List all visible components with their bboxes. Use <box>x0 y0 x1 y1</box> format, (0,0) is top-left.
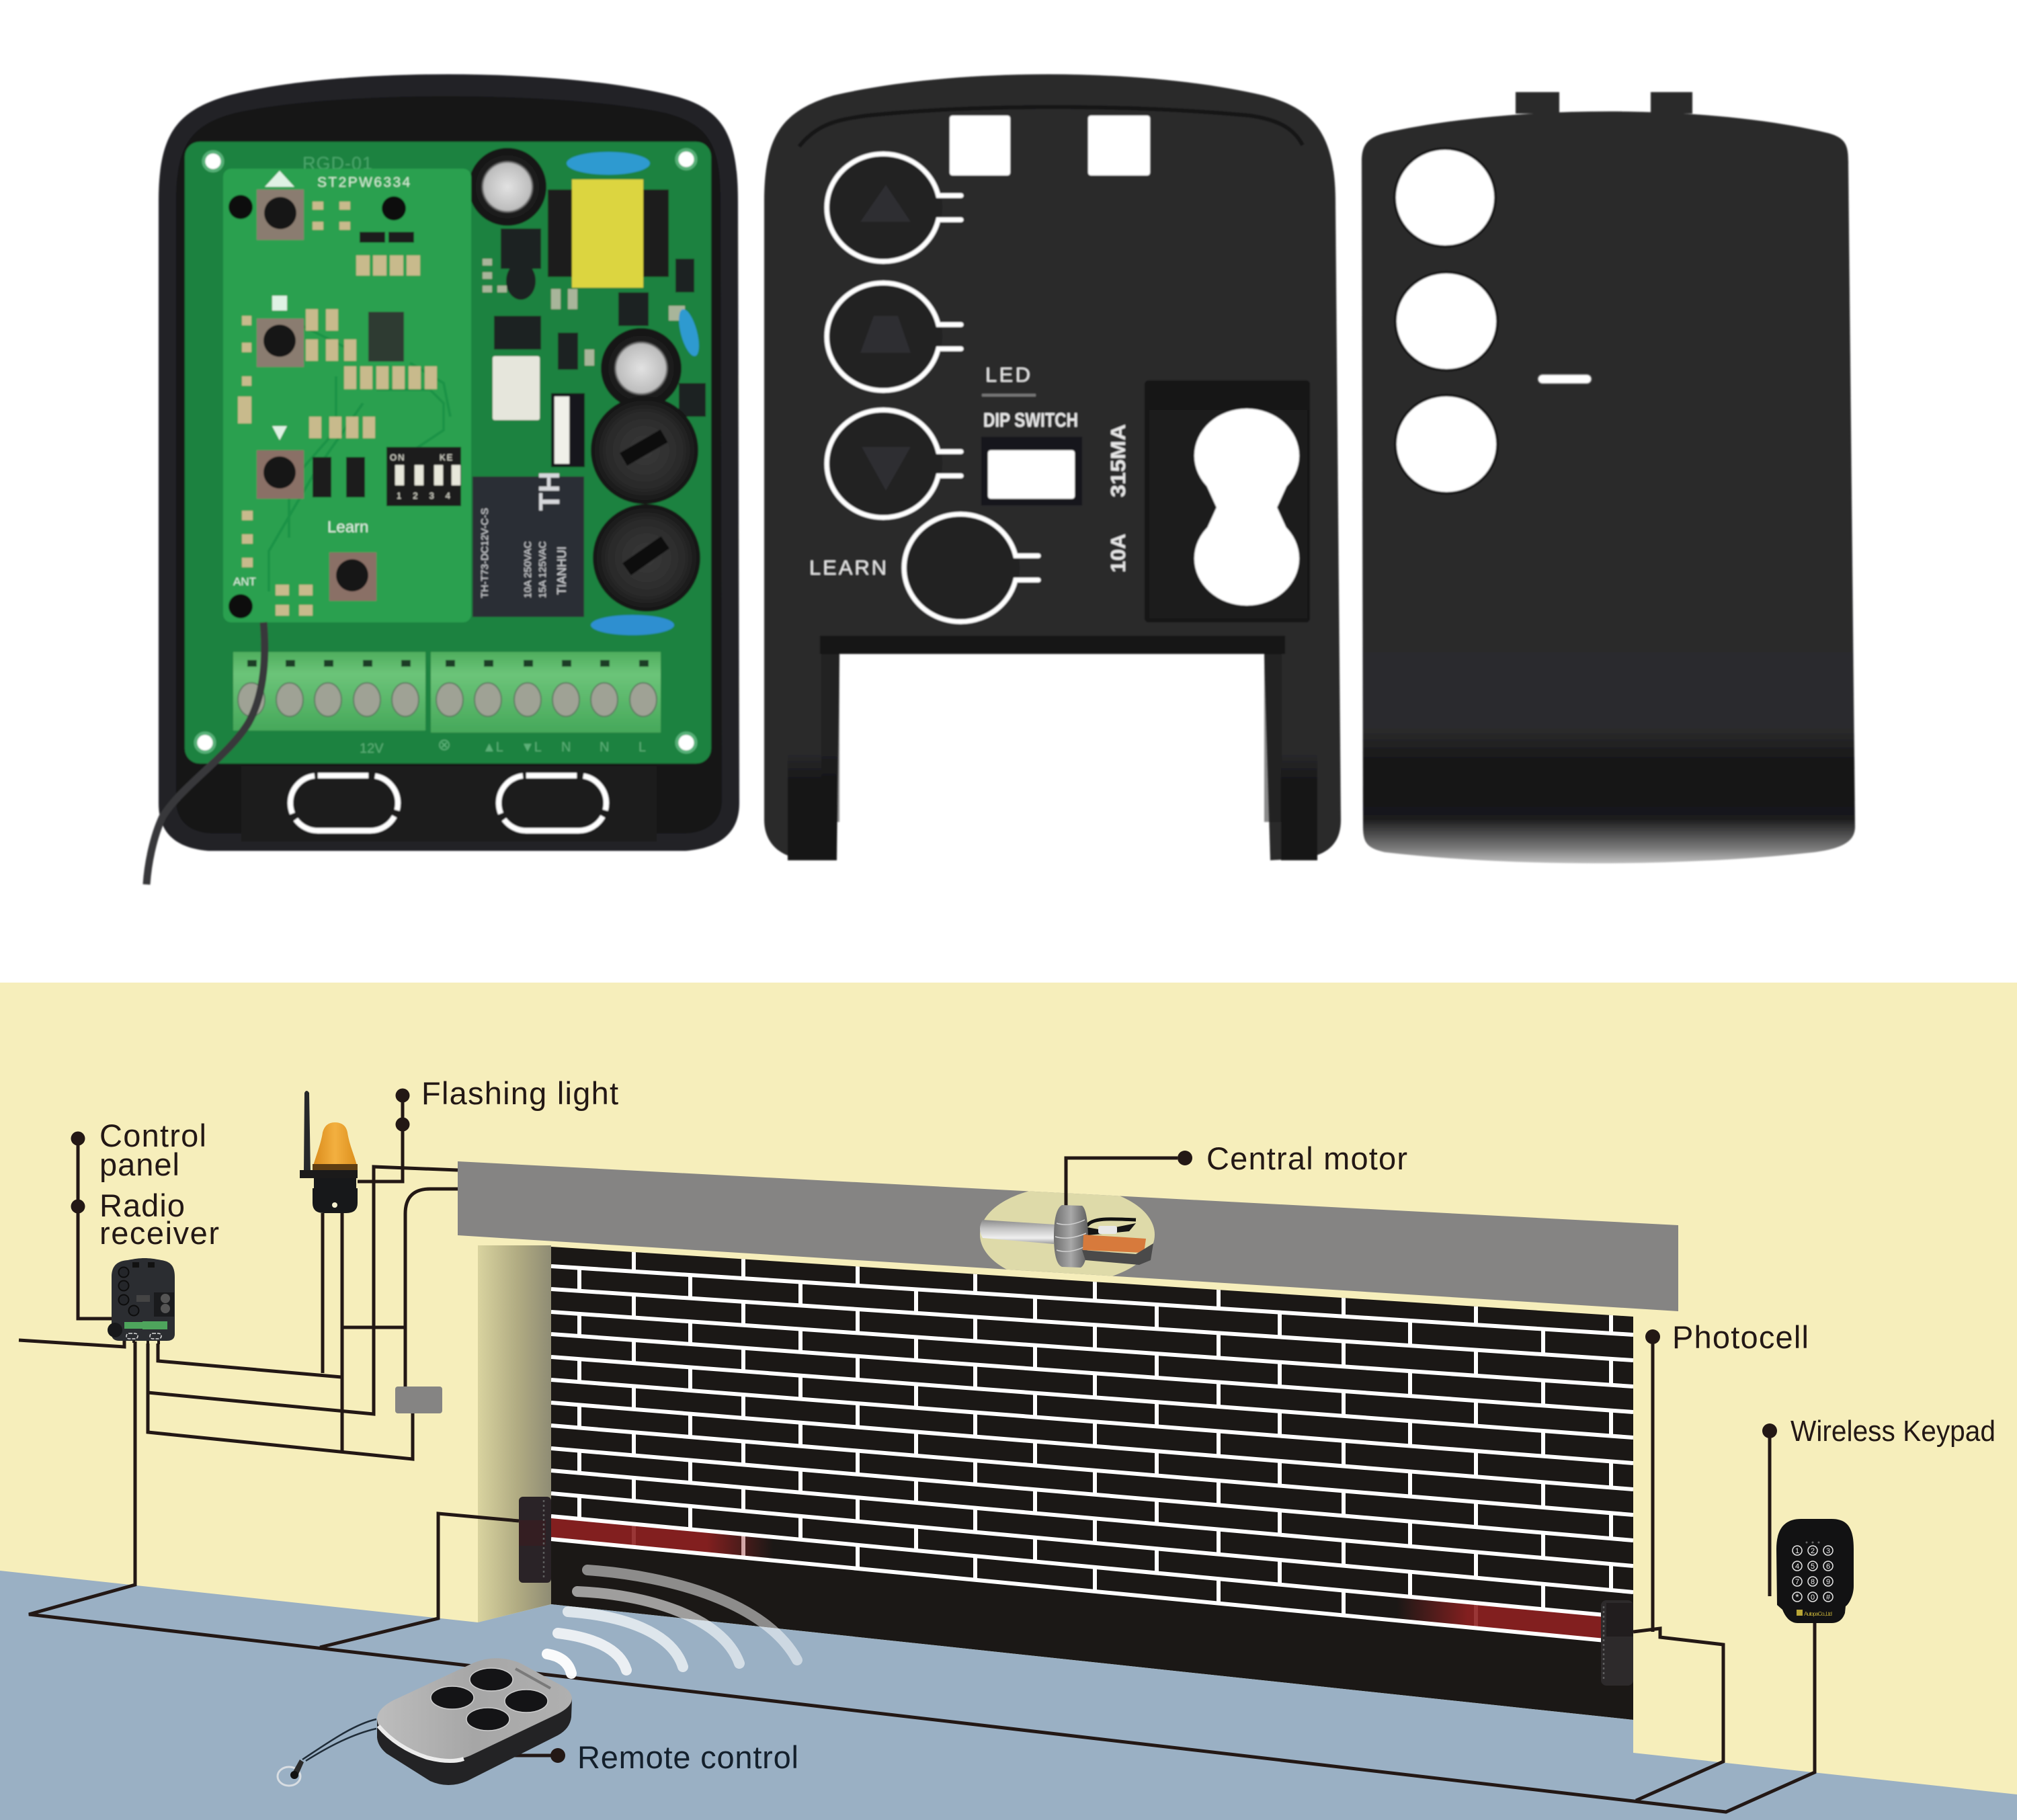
fuse area <box>154 1292 174 1317</box>
fuse recess <box>1145 380 1310 622</box>
remote front highlight <box>378 1726 464 1761</box>
key digits: 6 <box>1826 1563 1830 1571</box>
key ring <box>278 1760 304 1786</box>
terminal blocks <box>233 652 661 733</box>
relay: TH-T73-DC12V-C-S <box>479 508 491 598</box>
wire: switch box to receiver <box>148 1393 413 1459</box>
key digits: 2 <box>1811 1547 1815 1555</box>
DIP switch <box>386 447 462 506</box>
key digits: 3 <box>1826 1547 1830 1555</box>
wire: control panel leader <box>78 1139 114 1319</box>
case shell <box>159 74 739 851</box>
knockouts <box>126 1333 161 1339</box>
terminal slots <box>247 660 649 667</box>
LEARN label: LEARN <box>809 556 887 579</box>
windows <box>132 1262 155 1268</box>
board label: RGD-01 <box>302 153 373 173</box>
DIP window <box>981 437 1082 505</box>
white capacitor <box>1098 1226 1117 1234</box>
blue capacitor side <box>675 307 703 358</box>
main circuit board <box>185 142 711 763</box>
microchip <box>368 312 404 362</box>
capacitor top <box>468 148 546 226</box>
key digits: * <box>1795 1591 1799 1602</box>
blue capacitor bottom <box>591 615 674 635</box>
key digits: # <box>1826 1594 1831 1602</box>
DIP switch: 1234 <box>397 491 462 501</box>
daughter board <box>223 169 471 622</box>
door pillar <box>478 1245 551 1622</box>
label: central motor: Central motor <box>1206 1141 1407 1176</box>
steel shaft <box>980 1220 1055 1244</box>
wire: flashing light return <box>321 1213 324 1373</box>
brick pattern shutter door <box>551 1247 1633 1720</box>
panel: front cover plate <box>764 74 1341 860</box>
terminal labels: ⊗ <box>438 736 451 754</box>
icon: right photocell <box>1601 1600 1633 1686</box>
terminal labels: L <box>639 740 646 755</box>
key digits: 4 <box>1795 1563 1799 1571</box>
antenna label: ANT <box>233 575 256 588</box>
terminal screws <box>238 683 657 716</box>
door surface <box>551 1247 1633 1720</box>
key digits: 9 <box>1826 1578 1830 1586</box>
button rings <box>827 153 1038 622</box>
label: photocell: Photocell <box>1672 1319 1809 1355</box>
key digits <box>1795 1547 1831 1602</box>
infrared beam right <box>1402 1598 1601 1639</box>
central motor highlight <box>980 1191 1155 1276</box>
infrared beam left <box>551 1518 768 1558</box>
top tabs <box>1516 92 1692 114</box>
housing <box>112 1258 175 1341</box>
key ring cord <box>302 1719 376 1761</box>
black wiring <box>1087 1223 1136 1235</box>
antenna grommet <box>108 1323 122 1337</box>
leader dots <box>71 1089 1777 1763</box>
label: control panel: panel <box>99 1147 179 1182</box>
leg inner shadows <box>788 636 1317 860</box>
brick joints <box>579 1249 1611 1641</box>
terminal labels <box>360 736 646 756</box>
buttons <box>118 1268 138 1316</box>
wire: left photocell <box>320 1514 519 1647</box>
cover body <box>764 74 1341 860</box>
relay: TIANHUI <box>555 546 569 595</box>
DIP switch: ON <box>390 452 406 462</box>
wire: floor conduit <box>29 1341 1815 1812</box>
cable loop <box>1087 1219 1136 1226</box>
blue capacitor top <box>567 152 650 175</box>
regulator <box>551 393 585 467</box>
wire: right photocell <box>1633 1628 1723 1801</box>
orange gear housing <box>1083 1235 1146 1253</box>
remote top face <box>377 1658 572 1760</box>
power section components <box>494 229 706 417</box>
SMD parts <box>238 202 437 616</box>
terminal labels: ▼L <box>521 740 542 755</box>
label: flashing light: Flashing light <box>421 1075 618 1111</box>
label: radio receiver: receiver <box>99 1215 219 1251</box>
amber dome <box>313 1122 358 1168</box>
tactile buttons <box>257 190 376 601</box>
wire: central motor leader <box>1066 1158 1178 1220</box>
key digits: 7 <box>1795 1578 1799 1586</box>
screws <box>229 195 406 618</box>
remote slot <box>516 1669 550 1688</box>
relay: 10A 250VAC <box>522 541 534 598</box>
DIP switch label: DIP SWITCH <box>983 409 1078 431</box>
mounting holes <box>196 150 696 752</box>
key digits: 5 <box>1811 1563 1815 1571</box>
key circles <box>1793 1546 1833 1602</box>
wire: mains feed <box>19 1339 124 1347</box>
learn label: Learn <box>327 518 368 536</box>
brick courses <box>551 1266 1633 1643</box>
dome collar <box>313 1164 358 1172</box>
panel: back cover plate <box>1362 92 1855 863</box>
dip switch <box>136 1295 150 1302</box>
wire: lintel to receiver <box>148 1167 458 1414</box>
terminal labels: 12V <box>360 741 384 756</box>
small resistors power section <box>483 259 685 366</box>
wire: receiver output <box>158 1343 341 1377</box>
icon: left photocell <box>519 1497 551 1583</box>
panel: garage installation scene background wall <box>0 983 2017 1820</box>
lamp mount <box>300 1170 358 1178</box>
lamp base <box>313 1178 358 1213</box>
relay <box>472 471 584 617</box>
output wires <box>134 1341 159 1344</box>
fuse label 10A: 10A <box>1106 534 1130 573</box>
labels <box>99 1075 1995 1775</box>
DIP switch: KE <box>440 452 454 462</box>
relay: 15A 125VAC <box>537 541 548 598</box>
button holes <box>1395 149 1497 493</box>
label: control panel: Control <box>99 1118 206 1153</box>
fuse label 315MA: 315MA <box>1106 424 1130 497</box>
door lintel <box>458 1161 1678 1311</box>
yellow transformer <box>548 179 669 288</box>
embossed arrows <box>860 185 911 491</box>
wire: keypad leader <box>1768 1431 1772 1596</box>
white page background <box>0 0 2017 983</box>
antenna wire <box>147 622 265 884</box>
icon: receiver unit <box>108 1258 175 1344</box>
key digits: 8 <box>1811 1578 1815 1586</box>
cable knockouts band <box>241 766 657 841</box>
capacitor middle <box>601 328 682 409</box>
icon: remote control <box>278 1658 572 1786</box>
label divider <box>982 394 1036 397</box>
fuse holders <box>591 397 700 612</box>
signal waves <box>547 1570 797 1673</box>
window cutouts <box>950 116 1150 175</box>
LED slot <box>1538 374 1592 384</box>
terminals <box>124 1321 167 1329</box>
key digits: 1 <box>1795 1547 1799 1555</box>
button arrows <box>265 171 294 440</box>
wire: remote leader <box>513 1754 554 1757</box>
icon: flashing light <box>300 1091 358 1213</box>
board serial number: ST2PW6334 <box>317 175 412 190</box>
case inner wall <box>176 96 722 833</box>
transistors <box>313 232 414 497</box>
printed traces <box>269 323 450 591</box>
terminal labels: ▲L <box>483 740 503 755</box>
label: radio receiver: Radio <box>99 1188 185 1223</box>
relay: TH <box>533 471 566 511</box>
terminal labels: N <box>561 740 571 755</box>
wiring <box>19 1095 1815 1812</box>
winding drum <box>1054 1205 1088 1268</box>
status LEDs <box>1805 1542 1820 1543</box>
keypad maker label: AutopaCo.,Ltd <box>1804 1610 1832 1617</box>
icon: wireless keypad <box>1776 1519 1854 1623</box>
keypad housing <box>1776 1519 1854 1623</box>
switch box <box>395 1387 442 1413</box>
terminal labels: N <box>600 740 609 755</box>
wire: flashing light leader <box>358 1095 403 1182</box>
LED label: LED <box>985 363 1030 386</box>
floor <box>0 1571 2017 1820</box>
label: wireless keypad: Wireless Keypad <box>1790 1415 1995 1448</box>
key digits: 0 <box>1811 1594 1815 1602</box>
remote lower body <box>377 1698 572 1785</box>
wire: lintel to switch box <box>405 1189 458 1387</box>
label: remote control: Remote control <box>577 1739 798 1775</box>
wire: photocell leader <box>1651 1337 1655 1632</box>
antenna <box>304 1091 311 1173</box>
white optocoupler <box>493 356 540 420</box>
remote buttons <box>431 1668 548 1731</box>
gearbox underside <box>1082 1243 1153 1265</box>
panel: opened receiver case with circuit board <box>147 74 739 884</box>
icon: central tubular motor <box>980 1205 1153 1268</box>
wire: flashing light feed <box>342 1213 405 1452</box>
top rim <box>799 107 1303 147</box>
cover body <box>1362 112 1855 863</box>
